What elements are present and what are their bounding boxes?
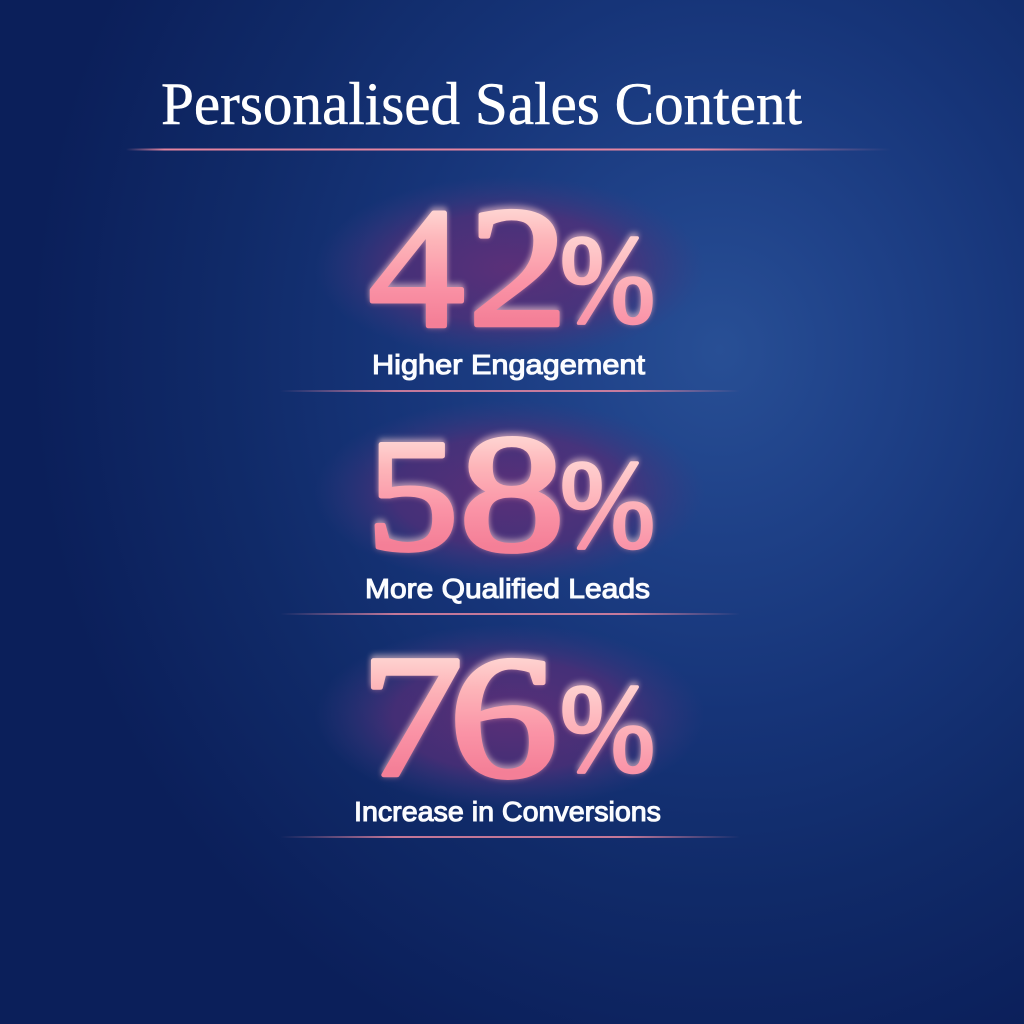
number: 76%: 6 [449,620,558,814]
number: 42% [368,173,655,364]
number: 76% [360,619,655,814]
number: 76%: % [560,660,655,799]
number: 58%: 5 [366,406,458,584]
number: 42%: 2 [468,173,568,363]
title divider [126,148,891,150]
stat: 58% more qualified leads [365,401,655,604]
stat: 42% higher engagement [368,173,655,380]
label: increase in conversions: Increase in Conversions [354,796,661,827]
number: 58%: % [560,436,655,575]
number: 42%: % [560,211,655,350]
number: 58%: 8 [459,401,565,587]
number: 76%: 7 [360,619,463,813]
title: Personalised Sales Content [161,71,802,137]
label: more qualified leads: More Qualified Leads [365,573,650,604]
number: 58% [366,401,655,587]
stat: 76% increase in conversions [354,619,661,827]
label: higher engagement: Higher Engagement [372,349,645,380]
number: 42%: 4 [368,174,464,364]
